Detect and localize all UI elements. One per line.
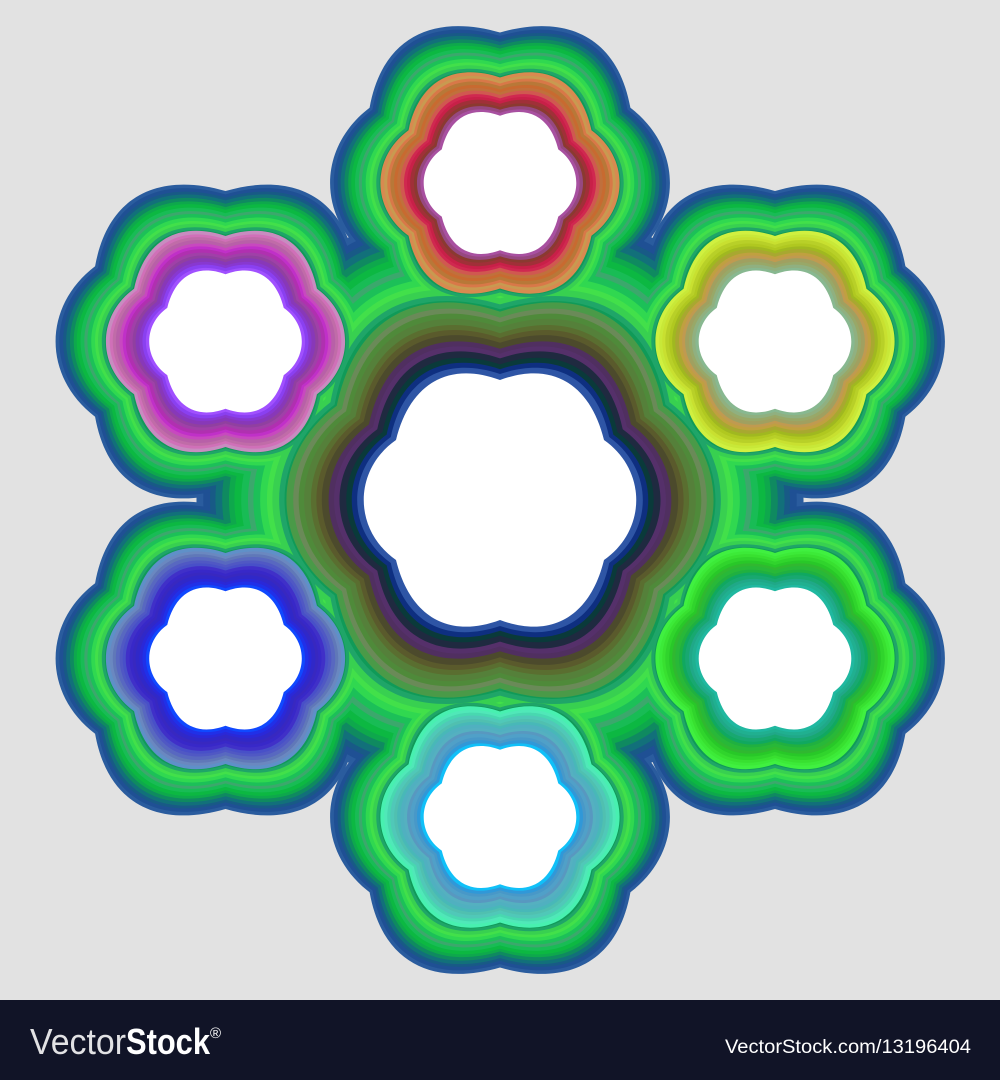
footer logo: VectorStock: Stock [126, 1021, 211, 1062]
panel: lower-right green petal [655, 548, 895, 769]
panel: upper-right yellow petal [655, 231, 895, 452]
panel: top orange petal [380, 72, 620, 294]
footer logo: VectorStock [30, 1021, 221, 1062]
panel: lower-left blue petal [106, 548, 345, 769]
panel: bottom aqua petal [380, 706, 620, 928]
footer image id: VectorStock.com/13196404 [725, 1036, 971, 1058]
footer logo: VectorStock: Vector [30, 1021, 126, 1062]
shared blue-green outer rings [56, 26, 945, 974]
panel: upper-left purple petal [106, 231, 345, 452]
footer logo: VectorStock: ® [210, 1025, 221, 1042]
footer bar [0, 1000, 1000, 1080]
panel: centre ring [286, 302, 714, 698]
